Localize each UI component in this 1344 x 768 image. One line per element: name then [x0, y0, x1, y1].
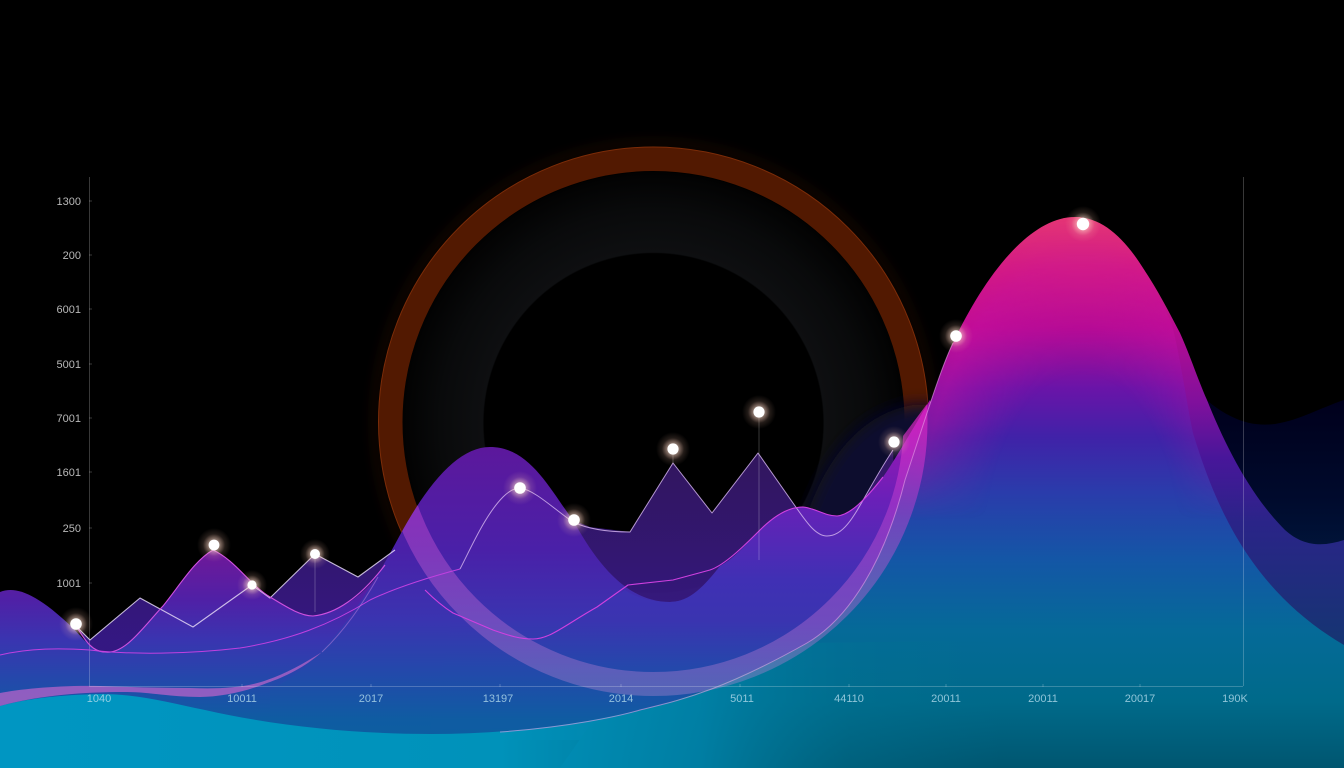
x axis labels: 5011 [730, 693, 754, 705]
magenta line left [76, 550, 385, 652]
front teal wave [0, 640, 1000, 768]
y axis labels: 5001 [57, 359, 81, 371]
x axis labels [87, 693, 1249, 705]
x axis labels: 13197 [483, 693, 513, 705]
right outer hill [1075, 217, 1344, 700]
long violet line [0, 569, 460, 655]
x axis labels: 44110 [834, 693, 864, 705]
mid blue hill [430, 400, 960, 730]
x axis labels: 20017 [1125, 693, 1155, 705]
y axis labels: 7001 [57, 413, 81, 425]
dot stems [315, 412, 759, 612]
main peak [632, 217, 1344, 768]
left hump and hill area [0, 550, 420, 740]
x axis labels: 1040 [87, 693, 111, 705]
lower magenta line [425, 477, 883, 639]
x axis labels: 20011 [1028, 693, 1058, 705]
x axis labels: 2017 [359, 693, 383, 705]
translucent ring over hills [402, 404, 928, 696]
y axis labels: 6001 [57, 304, 81, 316]
x axis labels: 190K [1222, 693, 1249, 705]
y axis labels: 1300 [57, 196, 81, 208]
y axis labels: 1001 [57, 578, 81, 590]
data lines [0, 343, 953, 732]
shaded area under zigzag line [76, 450, 900, 680]
white zigzag line [76, 550, 395, 640]
orange ring [374, 143, 932, 701]
axes [89, 177, 1244, 687]
thin edge of central hill [322, 577, 378, 652]
glowing data points [59, 206, 1101, 641]
x axis labels: 20011 [931, 693, 961, 705]
central purple hill [270, 447, 760, 740]
line central peak and zigzag [460, 450, 893, 569]
y axis labels: 1601 [57, 467, 81, 479]
back navy wave right [1190, 385, 1344, 600]
pink band lower left [0, 652, 322, 706]
back navy glow behind chart [795, 405, 940, 560]
dark haze disc inside ring [402, 172, 904, 674]
y axis labels: 200 [63, 250, 81, 262]
x axis labels: 10011 [227, 693, 257, 705]
hill outline highlight [500, 343, 953, 732]
y axis labels: 250 [63, 523, 81, 535]
y axis labels [57, 196, 81, 590]
x axis labels: 2014 [609, 693, 633, 705]
